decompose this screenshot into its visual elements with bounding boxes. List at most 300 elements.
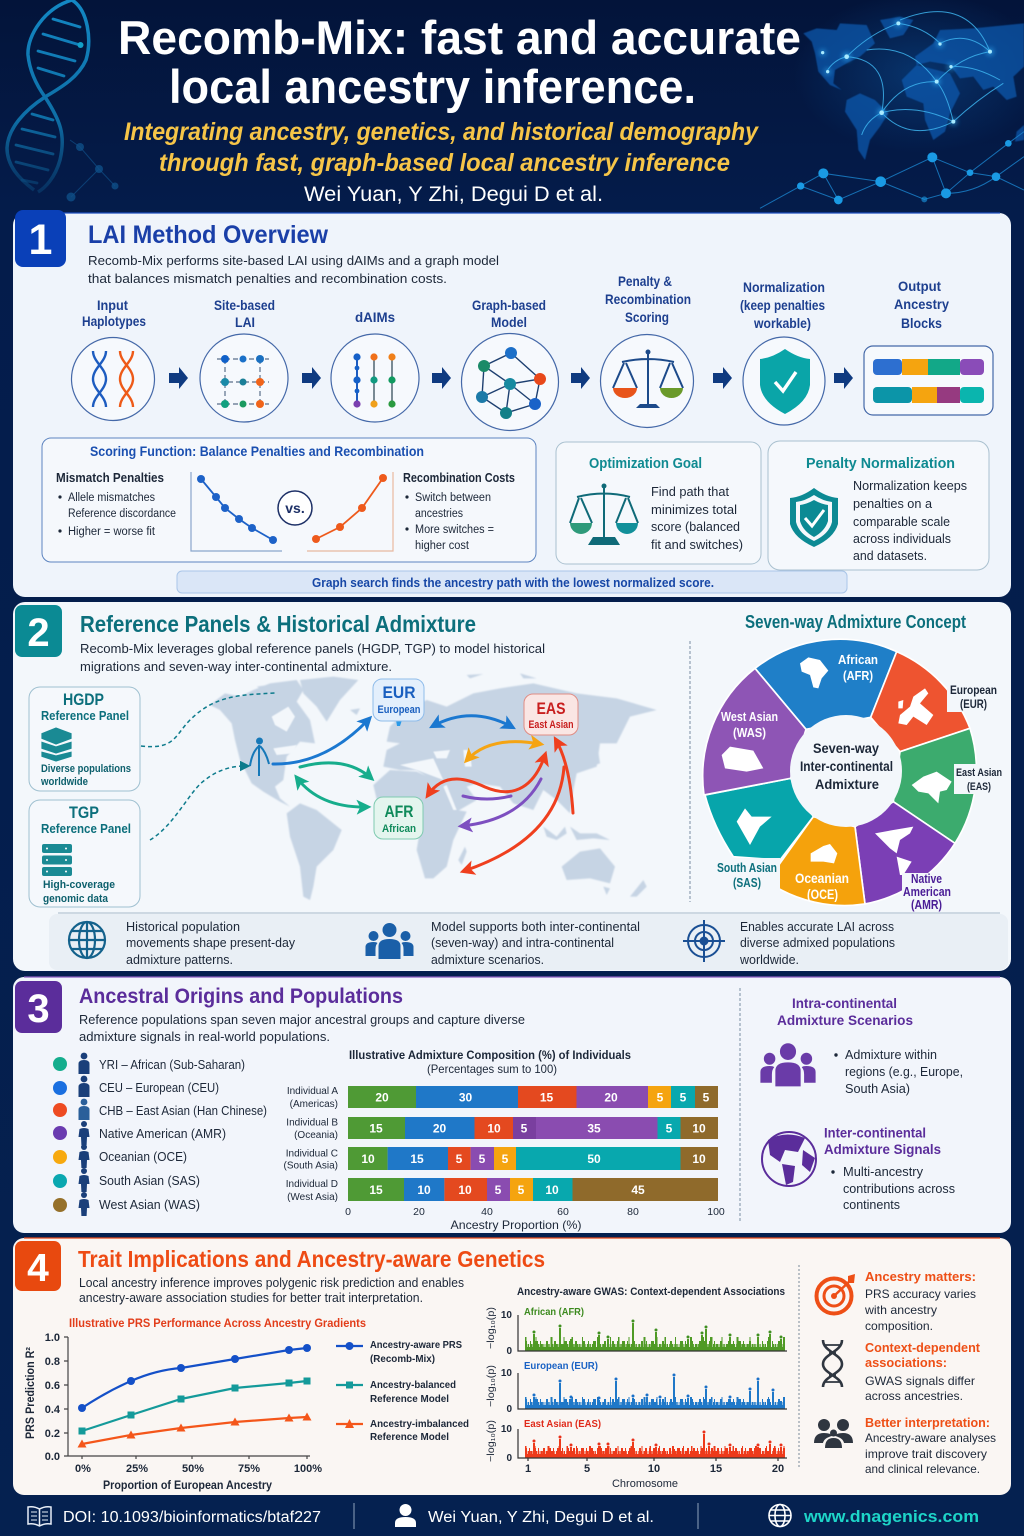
bar values: 5: [703, 1090, 710, 1104]
step: graph-based model: [462, 297, 558, 430]
bar values: 5: [666, 1122, 673, 1136]
penalty normalization box: and datasets.: [853, 548, 927, 563]
message: context-dependent: [865, 1340, 981, 1403]
recombination costs text: Recombination Costs: [403, 471, 515, 485]
note: model support: (seven-way) and intra-continental: [431, 935, 614, 950]
chart legend: [336, 1339, 469, 1443]
recombination costs text: Switch between: [415, 492, 491, 504]
optimization goal box: Find path that: [651, 484, 729, 499]
bar values: 5: [456, 1152, 463, 1166]
population legend: YRI – African (Sub-Saharan): [99, 1058, 245, 1072]
population legend: CEU – European (CEU): [99, 1081, 219, 1095]
mismatch curve: [191, 472, 282, 551]
TGP card: [29, 800, 140, 907]
step: normalization: [740, 279, 825, 425]
wheel labels: African: [838, 653, 878, 667]
axis: 0: [345, 1206, 351, 1218]
population legend: South Asian (SAS): [99, 1174, 200, 1188]
optimization goal box: fit and switches): [651, 537, 743, 552]
wheel labels: (OCE): [807, 886, 838, 902]
step: output ancestry blocks: Blocks: [901, 315, 942, 331]
step: dAIMs: dAIMs: [355, 309, 395, 325]
plot: African: [486, 1306, 787, 1357]
note: intra-continental: regions (e.g., Europe,: [845, 1065, 963, 1079]
bar values: 10: [487, 1122, 501, 1136]
bar values: 5: [680, 1090, 687, 1104]
bar B: [348, 1117, 718, 1139]
step: input haplotypes: [72, 297, 154, 420]
callout bar: Graph search finds the ancestry path with the lowest normalized score.: [312, 576, 714, 590]
icon: DNA: [823, 1340, 842, 1387]
message: better interpretation: [865, 1415, 996, 1476]
region tag: EAS: East Asian: [528, 719, 574, 731]
wheel labels: South Asian: [717, 861, 777, 875]
bar values: 20: [375, 1090, 389, 1104]
message: context-dependent: across ancestries.: [865, 1389, 963, 1403]
plot: European: [486, 1360, 787, 1415]
icon: servers: [42, 844, 72, 876]
axis: 80: [627, 1206, 639, 1218]
step: normalization: Normalization: [743, 279, 825, 295]
icon: group: [814, 1419, 853, 1448]
TGP card: TGP: [69, 803, 99, 822]
bar values: 10: [692, 1122, 706, 1136]
description 3: [79, 1012, 525, 1044]
description 1: [88, 253, 499, 286]
bar values: 10: [417, 1183, 431, 1197]
description 4: Local ancestry inference improves polygenic risk prediction and enables: [79, 1276, 464, 1290]
row labels: (Oceania): [294, 1130, 338, 1141]
bar values: 15: [369, 1183, 383, 1197]
stacked bar chart: [284, 1048, 725, 1232]
chromosome axis: 10: [648, 1463, 660, 1475]
recombination costs text: ancestries: [415, 508, 463, 520]
population legend: CHB – East Asian (Han Chinese): [99, 1104, 267, 1118]
description 1: that balances mismatch penalties and recombination costs.: [88, 271, 447, 286]
region tag: EUR: EUR: [382, 683, 416, 702]
region tag: AFR: [374, 797, 423, 839]
arrow: [834, 367, 853, 389]
message: ancestry matters: [864, 1269, 976, 1333]
plot: East Asian: −log₁₀(p): [486, 1420, 497, 1462]
PRS line chart: 0.8: [45, 1356, 60, 1368]
sidebar: admixture scenarios: [740, 988, 963, 1223]
axis: Ancestry Proportion (%): [450, 1218, 582, 1232]
wheel labels: East Asian: [956, 767, 1002, 779]
icon: DNA helix: [7, 0, 118, 202]
footer: [28, 1503, 979, 1529]
plot: European: European (EUR): [524, 1360, 598, 1372]
wheel labels: (WAS): [733, 726, 766, 740]
bar C: [348, 1147, 718, 1170]
wheel labels: European: [950, 685, 997, 697]
note: inter-continental: [831, 1165, 955, 1212]
region tag: EUR: European: [378, 704, 421, 716]
icon: globe: [69, 922, 105, 958]
icon: target: [683, 920, 725, 962]
stacked bar chart: (Percentages sum to 100): [427, 1062, 557, 1076]
region tag: EUR: [373, 679, 424, 726]
PRS line chart: 0.0: [45, 1451, 60, 1463]
bar values: [361, 1090, 710, 1197]
PRS line chart: Illustrative PRS Performance Across Ancestry Gradients: [69, 1316, 366, 1330]
axis: 40: [481, 1206, 493, 1218]
chart legend: Ancestry-imbalanced: [370, 1418, 469, 1430]
badge 3: [15, 981, 62, 1033]
panel 3: Ancestral Origins: [13, 977, 1011, 1233]
wheel labels: Oceanian: [795, 870, 849, 886]
mismatch penalties text: Mismatch Penalties: [56, 471, 164, 485]
section: seven-way admixture: [690, 612, 1004, 913]
wheel labels: (EAS): [967, 781, 991, 793]
chromosome axis: 5: [584, 1463, 590, 1475]
GWAS Manhattan plots: Ancestry-aware GWAS: Context-dependent Associations: [517, 1286, 785, 1298]
message: better interpretation: Ancestry-aware analyses: [865, 1431, 996, 1445]
GWAS Manhattan plots: [486, 1286, 787, 1490]
axis: 60: [557, 1206, 569, 1218]
series: ancestry-balanced: [78, 1378, 310, 1434]
icon: migration origin person: [250, 738, 269, 776]
message: ancestry matters: PRS accuracy varies: [865, 1287, 976, 1301]
axis: [345, 1206, 725, 1232]
bar values: 5: [521, 1122, 528, 1136]
description 3: admixture signals in real-world populations.: [79, 1029, 330, 1044]
dashed connectors: [141, 693, 275, 840]
message: ancestry matters: composition.: [865, 1319, 933, 1333]
description 2: [80, 641, 545, 674]
chart legend: Ancestry-aware PRS: [370, 1339, 462, 1351]
badge 2: [15, 605, 62, 657]
step: site-based LAI: [200, 297, 288, 422]
arrow: [302, 367, 321, 389]
step: graph-based model: Graph-based: [472, 297, 546, 313]
badge 1: 1: [29, 216, 52, 264]
note: population movements: admixture patterns.: [126, 952, 233, 967]
note: inter-continental: contributions across: [843, 1182, 955, 1196]
plot: African: 10: [501, 1310, 512, 1321]
PRS line chart: 50%: [182, 1463, 204, 1475]
bar values: 15: [369, 1122, 383, 1136]
icon: data books: [41, 727, 72, 762]
chart legend: (Recomb-Mix): [370, 1353, 435, 1365]
wheel center: Inter-continental: [800, 758, 893, 774]
plot: East Asian: 10: [501, 1424, 512, 1435]
note: population movements: [126, 919, 295, 967]
description 3: Reference populations span seven major ancestral groups and capture diverse: [79, 1012, 525, 1027]
step: input haplotypes: Haplotypes: [82, 313, 146, 329]
wheel center: Admixture: [815, 776, 879, 792]
step: output ancestry blocks: Ancestry: [894, 296, 949, 312]
wheel labels: (AMR): [911, 898, 942, 912]
plot: African: −log₁₀(p): [486, 1307, 497, 1349]
world map: [210, 673, 657, 900]
HGDP card: Diverse populations: [41, 763, 131, 775]
wheel labels: Native: [911, 872, 942, 886]
row labels: (West Asia): [287, 1192, 338, 1203]
panel 4: Trait Implications: [13, 1238, 1011, 1495]
bar values: 10: [692, 1152, 706, 1166]
bar values: 10: [458, 1183, 472, 1197]
optimization goal box: [556, 442, 761, 564]
chromosome axis: 15: [710, 1463, 722, 1475]
title: [118, 11, 801, 113]
panel 1: LAI Method Overview: [13, 210, 1011, 597]
population legend: Native American (AMR): [99, 1127, 226, 1141]
scoring function box: [42, 438, 536, 562]
description 2: migrations and seven-way inter-continental admixture.: [80, 659, 392, 674]
axis: 20: [413, 1206, 425, 1218]
step: normalization: (keep penalties: [740, 297, 825, 313]
stacked bar chart: Illustrative Admixture Composition (%) of Individuals: [349, 1048, 631, 1062]
heading 1: LAI Method Overview: [88, 221, 329, 249]
note: intra-continental: Admixture within: [845, 1048, 937, 1062]
chromosome axis: [525, 1463, 784, 1490]
mismatch penalties text: [56, 471, 176, 538]
icon: people: [366, 923, 414, 959]
icon: glowing world network: [760, 0, 1024, 208]
step: normalization: workable): [753, 315, 811, 331]
bar values: 35: [587, 1122, 601, 1136]
bar values: 20: [604, 1090, 618, 1104]
PRS line chart: 0.4: [45, 1404, 61, 1416]
note: inter-continental: Multi-ancestry: [843, 1165, 924, 1179]
website: www.dnagenics.com: [803, 1507, 979, 1526]
icon: shield: [790, 488, 838, 547]
axis: 100: [707, 1206, 725, 1218]
bar values: 30: [459, 1090, 472, 1104]
badge 1: [15, 210, 66, 267]
step: site-based LAI: Site-based: [214, 297, 275, 313]
icon: person: [395, 1504, 416, 1527]
row labels: Individual D: [286, 1179, 338, 1190]
arrow: [571, 367, 590, 389]
arrow: [713, 367, 732, 389]
bar values: 5: [657, 1090, 664, 1104]
PRS line chart: [25, 1316, 469, 1492]
note: accurate LAI: Enables accurate LAI across: [740, 919, 894, 934]
plot: European: 0: [506, 1404, 512, 1415]
message: context-dependent: GWAS signals differ: [865, 1374, 975, 1388]
penalty normalization box: [768, 441, 989, 570]
heading 3: Ancestral Origins and Populations: [79, 984, 403, 1008]
arrow: [169, 367, 188, 389]
row labels: (Americas): [290, 1099, 338, 1110]
TGP card: genomic data: [43, 893, 109, 905]
plot: European: 10: [501, 1368, 512, 1379]
step: output ancestry blocks: [864, 278, 993, 415]
bar values: 5: [495, 1183, 502, 1197]
description 1: Recomb-Mix performs site-based LAI using dAIMs and a graph model: [88, 253, 499, 268]
icon: open book: [28, 1507, 51, 1526]
sidebar: admixture scenarios: Intra-continental: [792, 996, 897, 1011]
bar values: 5: [479, 1152, 486, 1166]
region tag: AFR: AFR: [384, 802, 414, 821]
arrow: [432, 367, 451, 389]
row labels: Individual A: [287, 1086, 338, 1097]
message: ancestry matters: with ancestry: [864, 1303, 937, 1317]
region tag: EAS: EAS: [536, 699, 566, 718]
optimization goal box: minimizes total: [651, 502, 737, 517]
step: penalty scoring: Penalty &: [618, 273, 672, 289]
message: better interpretation: Better interpretation:: [865, 1415, 990, 1430]
series: ancestry-imbalanced: [78, 1412, 312, 1448]
mismatch penalties text: Allele mismatches: [68, 492, 155, 504]
step: graph-based model: Model: [491, 314, 527, 330]
badge 2: 2: [27, 611, 50, 655]
PRS line chart: 75%: [238, 1463, 260, 1475]
icon: purple people: [760, 1043, 816, 1086]
note: model support: Model supports both inter-continental: [431, 919, 640, 934]
title: Recomb-Mix: fast and accurate: [118, 11, 801, 64]
note: accurate LAI: [739, 919, 895, 967]
penalty normalization box: penalties on a: [853, 496, 933, 511]
description 4: ancestry-aware association studies for better trait interpretation.: [79, 1291, 423, 1305]
step: penalty scoring: Recombination: [605, 291, 691, 307]
sidebar: key messages: [799, 1265, 996, 1476]
region tag: EAS: [524, 694, 578, 735]
PRS line chart: Proportion of European Ancestry: [103, 1480, 273, 1492]
wheel center: Seven-way: [813, 740, 879, 756]
sidebar: admixture scenarios: Admixture Signals: [824, 1142, 941, 1157]
penalty normalization box: comparable scale: [853, 514, 950, 529]
authors: Wei Yuan, Y Zhi, Degui D et al.: [428, 1509, 654, 1526]
sidebar: admixture scenarios: Inter-continental: [824, 1126, 926, 1140]
bar values: 10: [545, 1183, 559, 1197]
bar values: 20: [433, 1122, 446, 1136]
penalty normalization box: Penalty Normalization: [806, 456, 955, 472]
sidebar: admixture scenarios: Admixture Scenarios: [777, 1013, 913, 1028]
TGP card: High-coverage: [43, 879, 115, 891]
plot: East Asian: East Asian (EAS): [524, 1418, 601, 1430]
bar A: [348, 1086, 718, 1108]
step: output ancestry blocks: Output: [898, 278, 941, 294]
row labels: (South Asia): [284, 1160, 338, 1172]
population legend: [53, 1053, 267, 1216]
PRS line chart: PRS Prediction R²: [25, 1347, 37, 1439]
message: context-dependent: Context-dependent: [865, 1340, 981, 1355]
icon: bullseye: [816, 1274, 855, 1314]
bottom strip: [49, 913, 1008, 970]
PRS line chart: 0.6: [45, 1380, 60, 1392]
panel 2: Reference Panels: [13, 602, 1011, 971]
plot: European: −log₁₀(p): [486, 1365, 497, 1407]
migration arrows: [273, 716, 573, 871]
wheel labels: West Asian: [721, 710, 778, 724]
message: better interpretation: improve trait discovery: [865, 1447, 987, 1461]
plot: African: 0: [506, 1346, 512, 1357]
callout bar: [177, 571, 847, 593]
badge 4: 4: [27, 1247, 49, 1290]
note: accurate LAI: diverse admixed populations: [740, 935, 895, 950]
message: better interpretation: and clinical relevance.: [865, 1462, 980, 1476]
HGDP card: Reference Panel: [41, 709, 129, 723]
plot: East Asian: 0: [506, 1453, 512, 1464]
chart legend: Reference Model: [370, 1393, 449, 1405]
scoring function box: Scoring Function: Balance Penalties and Recombination: [90, 443, 424, 459]
series: ancestry-aware: [78, 1344, 311, 1412]
PRS line chart: 25%: [126, 1463, 148, 1475]
step: penalty scoring: Scoring: [625, 309, 669, 325]
wheel labels: American: [903, 885, 951, 899]
chromosome axis: 20: [772, 1463, 784, 1475]
description 4: [79, 1276, 464, 1305]
chromosome axis: 1: [525, 1463, 531, 1475]
chart legend: Reference Model: [370, 1431, 449, 1443]
mismatch penalties text: Reference discordance: [68, 508, 176, 520]
wheel labels: (AFR): [843, 669, 873, 683]
PRS line chart: 1.0: [45, 1332, 60, 1344]
icon: globe: [769, 1504, 791, 1526]
bar values: 5: [502, 1152, 509, 1166]
region tag: AFR: African: [382, 823, 416, 835]
row labels: [284, 1086, 338, 1203]
recombination curve: [307, 472, 393, 551]
bar values: 10: [361, 1152, 375, 1166]
bar values: 15: [540, 1090, 553, 1104]
heading 4: Trait Implications and Ancestry-aware Genetics: [78, 1246, 545, 1272]
note: population movements: movements shape present-day: [126, 935, 295, 950]
subtitle: through fast, graph-based local ancestry inference: [159, 149, 730, 177]
title: local ancestry inference.: [169, 60, 696, 113]
message: context-dependent: associations:: [865, 1355, 947, 1370]
plot: African: African (AFR): [524, 1306, 584, 1318]
bar values: 45: [631, 1183, 645, 1197]
PRS line chart: 0.2: [45, 1428, 60, 1440]
step: penalty scoring: [600, 273, 694, 428]
HGDP card: worldwide: [40, 776, 88, 788]
DOI: DOI: 10.1093/bioinformatics/btaf227: [63, 1509, 321, 1526]
recombination costs text: [403, 471, 515, 552]
chart legend: Ancestry-balanced: [370, 1379, 456, 1391]
note: model support: admixture scenarios.: [431, 952, 544, 967]
HGDP card: HGDP: [63, 690, 104, 709]
vs badge: [278, 491, 312, 525]
heading 2: Reference Panels & Historical Admixture: [80, 611, 476, 637]
header banner: [7, 0, 1024, 208]
mismatch penalties text: Higher = worse fit: [68, 526, 156, 538]
wheel labels: [715, 653, 1004, 913]
chromosome axis: Chromosome: [612, 1478, 678, 1490]
PRS line chart: 100%: [294, 1463, 322, 1475]
vs badge: vs.: [285, 500, 305, 516]
note: intra-continental: [834, 1048, 963, 1096]
badge 4: [15, 1241, 61, 1291]
badge 3: 3: [27, 987, 50, 1031]
description 2: Recomb-Mix leverages global reference panels (HGDP, TGP) to model historical: [80, 641, 545, 656]
note: population movements: Historical population: [126, 919, 240, 934]
icon: purple globe: [762, 1132, 816, 1186]
step: dAIMs: [331, 309, 419, 422]
population legend: Oceanian (OCE): [99, 1150, 187, 1164]
step: input haplotypes: Input: [97, 297, 128, 313]
bar values: 15: [410, 1152, 424, 1166]
penalty normalization box: Normalization keeps: [853, 478, 967, 493]
wheel labels: (EUR): [960, 699, 987, 711]
note: accurate LAI: worldwide.: [739, 952, 799, 967]
bar D: [348, 1178, 718, 1201]
subtitle: [124, 118, 759, 177]
wheel labels: (SAS): [733, 876, 761, 890]
recombination costs text: higher cost: [415, 540, 470, 552]
bar values: 5: [518, 1183, 525, 1197]
section: seven-way admixture: Seven-way Admixture Concept: [745, 612, 966, 632]
penalty normalization box: across individuals: [853, 531, 951, 546]
row labels: Individual C: [286, 1148, 338, 1160]
message: ancestry matters: Ancestry matters:: [865, 1269, 976, 1284]
optimization goal box: Optimization Goal: [589, 456, 702, 472]
wheel center: [790, 715, 902, 827]
TGP card: Reference Panel: [41, 822, 131, 836]
